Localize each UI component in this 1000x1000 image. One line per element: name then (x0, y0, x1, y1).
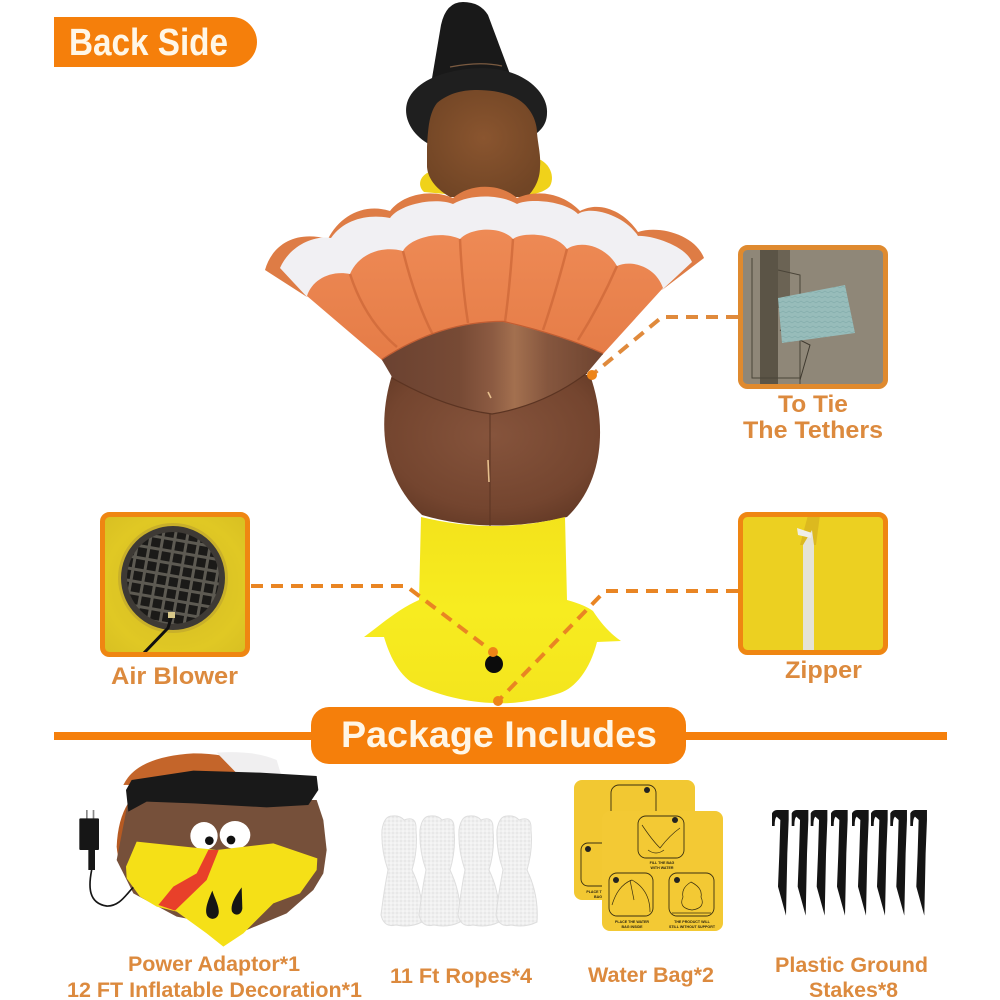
dashed leader: zipper (493, 591, 738, 706)
stake 6 (871, 810, 888, 916)
yellow beak (126, 842, 317, 947)
front water bag: STILL WITHOUT SUPPORT (669, 925, 716, 929)
rope 2 (419, 816, 460, 926)
divider line (54, 732, 947, 740)
back water bag (574, 780, 695, 900)
item: deflated turkey and power adaptor (79, 752, 327, 947)
inset: zipper (740, 514, 886, 652)
rope 3 (458, 816, 499, 926)
label: To Tie The Tethers: The Tethers (743, 417, 883, 444)
orange feathers (307, 230, 663, 360)
label: Plastic Ground Stakes (775, 953, 928, 1000)
inset: tether loop (740, 248, 886, 386)
front water bag: PLACE THE WATER (615, 920, 649, 924)
nostrils (206, 887, 242, 919)
stake 8 (910, 810, 927, 916)
front water bag: WITH WATER (651, 866, 674, 870)
back water bag: PLACE T (586, 890, 602, 894)
inset: air blower (102, 514, 248, 655)
white band (280, 196, 692, 297)
tail fan (265, 187, 704, 360)
rope 1 (381, 816, 422, 926)
front water bag: BAG INSIDE (622, 925, 643, 929)
back water bag: BAG (594, 895, 602, 899)
red snood (158, 850, 219, 911)
hat (126, 771, 318, 812)
hat cone (430, 2, 516, 90)
label: Water Bag: Water Bag*2 (588, 963, 714, 987)
label: To Tie The Tethers (743, 391, 883, 444)
badge: Package Includes (311, 707, 686, 764)
inflatable turkey back view (265, 2, 704, 703)
power adaptor (79, 810, 133, 906)
outer orange rim (265, 187, 704, 297)
front water bag: THE PRODUCT WILL (674, 920, 711, 924)
label: 11 Ft Ropes: 11 Ft Ropes*4 (390, 964, 532, 988)
upper body V panel (382, 322, 603, 526)
item: eight plastic stakes (772, 810, 927, 916)
label: Air Blower: Air Blower (111, 663, 238, 690)
item: water bags (574, 780, 723, 931)
air blower hole (485, 655, 503, 673)
yellow neck and base (364, 517, 621, 703)
badge: Package Includes: Package Includes (341, 713, 657, 755)
front water bag (602, 811, 723, 931)
front water bag: FILL THE BAG (650, 861, 675, 865)
rope 4 (496, 816, 537, 926)
item: four ropes (381, 816, 537, 926)
brown body (117, 800, 327, 930)
head (427, 90, 540, 197)
stake 1 (772, 810, 789, 916)
stake 4 (831, 810, 848, 916)
body (384, 375, 600, 526)
orange and white tail behind (117, 752, 282, 883)
stake 7 (890, 810, 907, 916)
badge: Back Side: Back Side (69, 22, 228, 64)
hat brim (406, 64, 547, 150)
yellow wattles (420, 157, 552, 195)
label: To Tie The Tethers: To Tie (778, 391, 848, 418)
dashed leader: tethers (587, 317, 738, 380)
label: Zipper: Zipper (785, 657, 862, 684)
label: Plastic Ground Stakes: Plastic Ground (775, 953, 928, 977)
stake 3 (811, 810, 827, 916)
stake 2 (792, 810, 808, 916)
stake 5 (852, 810, 869, 916)
label: Power Adaptor and Inflatable Decoration: Power Adaptor*1 (128, 952, 300, 976)
dashed leader: air blower (251, 586, 498, 657)
label: Power Adaptor and Inflatable Decoration (67, 952, 362, 1000)
eyes (190, 821, 250, 850)
